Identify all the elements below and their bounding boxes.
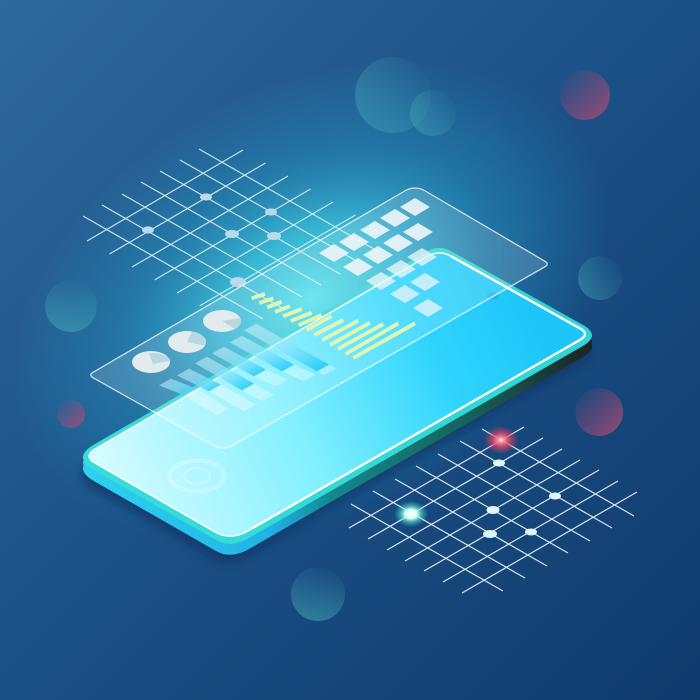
phone side (83, 253, 592, 555)
bar chart (159, 324, 336, 415)
decorative circles (45, 57, 623, 621)
camera notch (487, 292, 499, 300)
red glowing node (484, 426, 518, 454)
screen highlight edge (252, 256, 585, 528)
pie charts (132, 310, 241, 373)
panel frame (91, 188, 547, 448)
stepped area chart (252, 294, 415, 358)
cyan glowing node (394, 501, 428, 527)
home button (170, 460, 224, 492)
glass panel (91, 188, 547, 448)
phone rim (83, 248, 592, 544)
upper grid (83, 149, 379, 319)
phone shadow (81, 266, 590, 562)
tile grid (319, 198, 443, 317)
lower grid (349, 426, 637, 593)
phone (81, 248, 592, 562)
phone screen (89, 253, 585, 536)
